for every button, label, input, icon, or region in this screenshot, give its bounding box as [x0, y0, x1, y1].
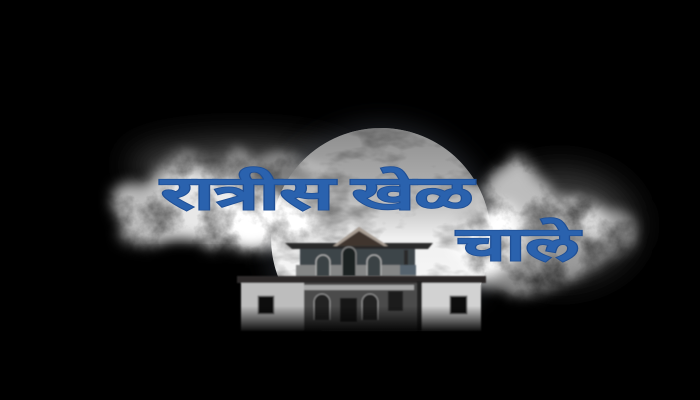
title	[159, 167, 582, 270]
house base fade	[232, 306, 490, 333]
shade below clouds and moon	[90, 254, 541, 400]
title: खेळ	[350, 167, 476, 219]
upper floor	[285, 227, 433, 277]
title line: second row: चाले	[455, 218, 582, 270]
house	[232, 227, 490, 333]
cloud: right	[454, 166, 633, 288]
title line: first words: रात्रीस	[159, 167, 337, 219]
moon	[267, 124, 495, 352]
haze behind clouds	[130, 141, 635, 280]
lower floor	[237, 276, 486, 331]
cloud: left	[114, 158, 325, 250]
